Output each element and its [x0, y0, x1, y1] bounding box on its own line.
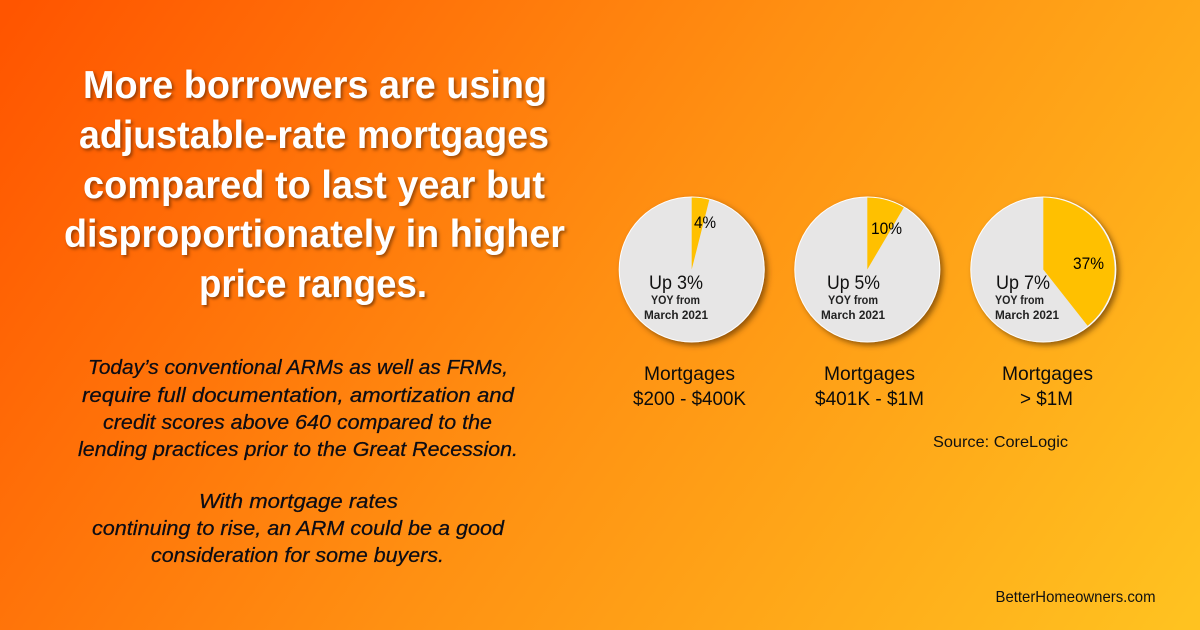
label: mortgages over $1M: > $1M [1020, 388, 1073, 410]
pie chart: mortgages over $1M: 37% [1073, 254, 1104, 273]
pie chart: mortgages $401K - $1M: YOY from [828, 293, 878, 307]
pie chart: mortgages $200 - $400K: 4% [694, 213, 716, 232]
text block: rising rates note [92, 490, 505, 567]
pie chart: mortgages over $1M: YOY from [995, 293, 1044, 307]
pie chart: mortgages $401K - $1M: Up 5% [827, 273, 880, 294]
website credit: BetterHomeowners.com [996, 589, 1156, 606]
label: mortgages $200 - $400K: Mortgages [644, 363, 735, 385]
title: disproportionately in higher [64, 213, 565, 256]
text block: rising rates note: With mortgage rates [199, 490, 398, 513]
label: mortgages $401K - $1M: $401K - $1M [815, 388, 924, 410]
text block: rising rates note: consideration for some buyers. [151, 544, 444, 567]
pie chart: mortgages $200 - $400K: YOY from [651, 293, 700, 307]
text block: rising rates note: continuing to rise, an ARM could be a good [92, 517, 505, 540]
text block: ARM documentation requirements: Today’s conventional ARMs as well as FRMs, [88, 356, 508, 379]
pie chart: mortgages $401K - $1M: March 2021 [821, 308, 885, 322]
pie chart: mortgages $200 - $400K: Up 3% [649, 273, 703, 294]
pie chart: mortgages over $1M: March 2021 [995, 308, 1059, 322]
pie chart: mortgages $200 - $400K [619, 197, 764, 342]
label: mortgages over $1M [1002, 363, 1093, 410]
text block: ARM documentation requirements: lending practices prior to the Great Recession. [78, 438, 518, 461]
text block: ARM documentation requirements [78, 356, 518, 461]
pie chart: mortgages over $1M [971, 197, 1116, 342]
pie chart: mortgages over $1M: Up 7% [996, 273, 1050, 294]
label: mortgages $401K - $1M [815, 363, 924, 410]
label: mortgages $401K - $1M: Mortgages [824, 363, 915, 385]
source note: Source: CoreLogic [933, 434, 1068, 451]
pie chart: mortgages $401K - $1M: 10% [871, 219, 902, 238]
title [64, 64, 565, 306]
label: mortgages over $1M: Mortgages [1002, 363, 1093, 385]
title: More borrowers are using [83, 64, 547, 107]
text block: ARM documentation requirements: credit scores above 640 compared to the [103, 411, 492, 434]
pie chart: mortgages $401K - $1M [795, 197, 940, 342]
label: mortgages $200 - $400K [633, 363, 746, 410]
title: adjustable-rate mortgages [79, 114, 549, 157]
text block: ARM documentation requirements: require full documentation, amortization and [82, 384, 515, 407]
label: mortgages $200 - $400K: $200 - $400K [633, 388, 746, 410]
title: price ranges. [199, 263, 427, 306]
pie chart: mortgages $200 - $400K: March 2021 [644, 308, 708, 322]
title: compared to last year but [83, 164, 545, 207]
